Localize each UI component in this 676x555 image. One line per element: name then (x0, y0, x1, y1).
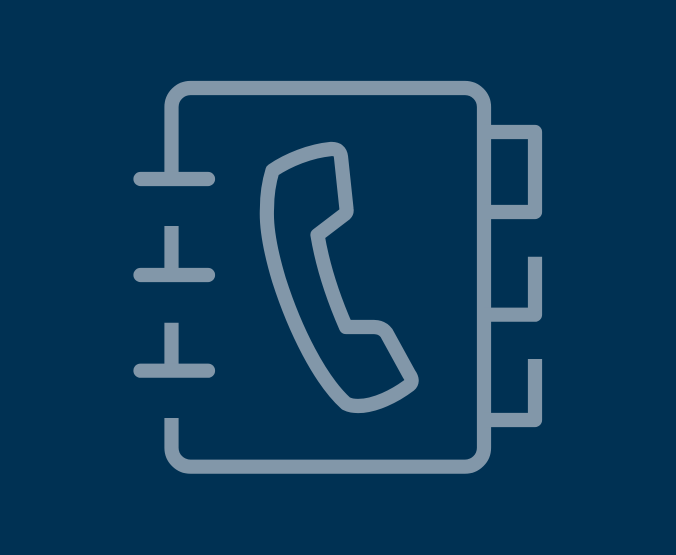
telephone handset (267, 149, 412, 406)
spine segments (164, 226, 179, 371)
spiral rings (140, 179, 208, 371)
book cover (172, 88, 484, 467)
index tabs (484, 132, 535, 420)
